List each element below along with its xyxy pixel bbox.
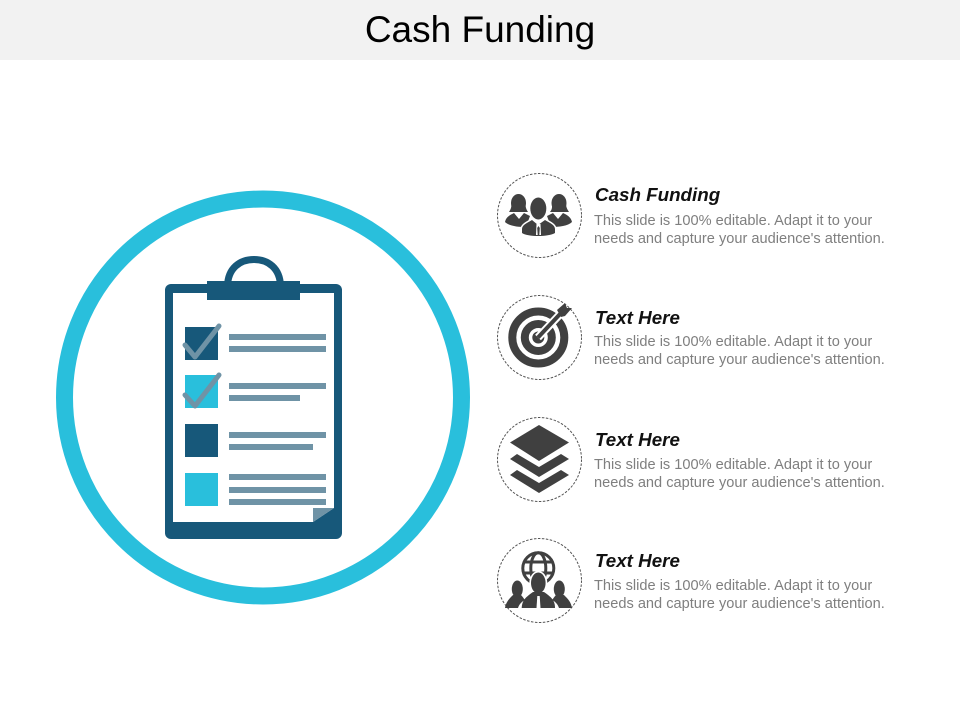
item 4 body: This slide is 100% editable. Adapt it to your (594, 578, 872, 594)
item 3 body: This slide is 100% editable. Adapt it to your (594, 457, 872, 473)
item 1 body (594, 213, 885, 247)
item 4 body (594, 578, 885, 612)
item 4 heading: Text Here (595, 550, 680, 571)
item 2 body (594, 334, 885, 368)
page fold (313, 508, 334, 522)
checklist row 2 (185, 375, 326, 408)
icon: target with arrow (498, 296, 582, 380)
item 1 heading: Cash Funding (595, 184, 720, 205)
title: Cash Funding (365, 9, 595, 50)
item 1 text (594, 184, 885, 247)
icon: global team (498, 538, 582, 622)
item 4 text (594, 550, 885, 612)
clipboard handle (228, 260, 280, 286)
item 2 heading: Text Here (595, 307, 680, 328)
item 3 text (594, 429, 885, 491)
item 3 heading: Text Here (595, 429, 680, 450)
cyan ring (64, 199, 462, 596)
clipboard (165, 260, 342, 539)
checklist row 1 (185, 326, 326, 360)
item 3 body: needs and capture your audience's attention. (594, 475, 885, 491)
item 4 body: needs and capture your audience's attention. (594, 596, 885, 612)
item 3 body (594, 457, 885, 491)
item 1 body: needs and capture your audience's attention. (594, 231, 885, 247)
icon: stacked layers (498, 418, 582, 502)
item 2 text (594, 307, 885, 368)
checklist row 3 (185, 424, 326, 457)
checklist row 4 (185, 473, 326, 506)
clip (207, 281, 300, 300)
icon: business team (498, 174, 582, 258)
item 2 body: needs and capture your audience's attention. (594, 352, 885, 368)
clipboard board (165, 284, 342, 539)
item 2 body: This slide is 100% editable. Adapt it to your (594, 334, 872, 350)
item 1 body: This slide is 100% editable. Adapt it to your (594, 213, 872, 229)
paper sheet (173, 293, 334, 522)
title bar (0, 0, 960, 60)
